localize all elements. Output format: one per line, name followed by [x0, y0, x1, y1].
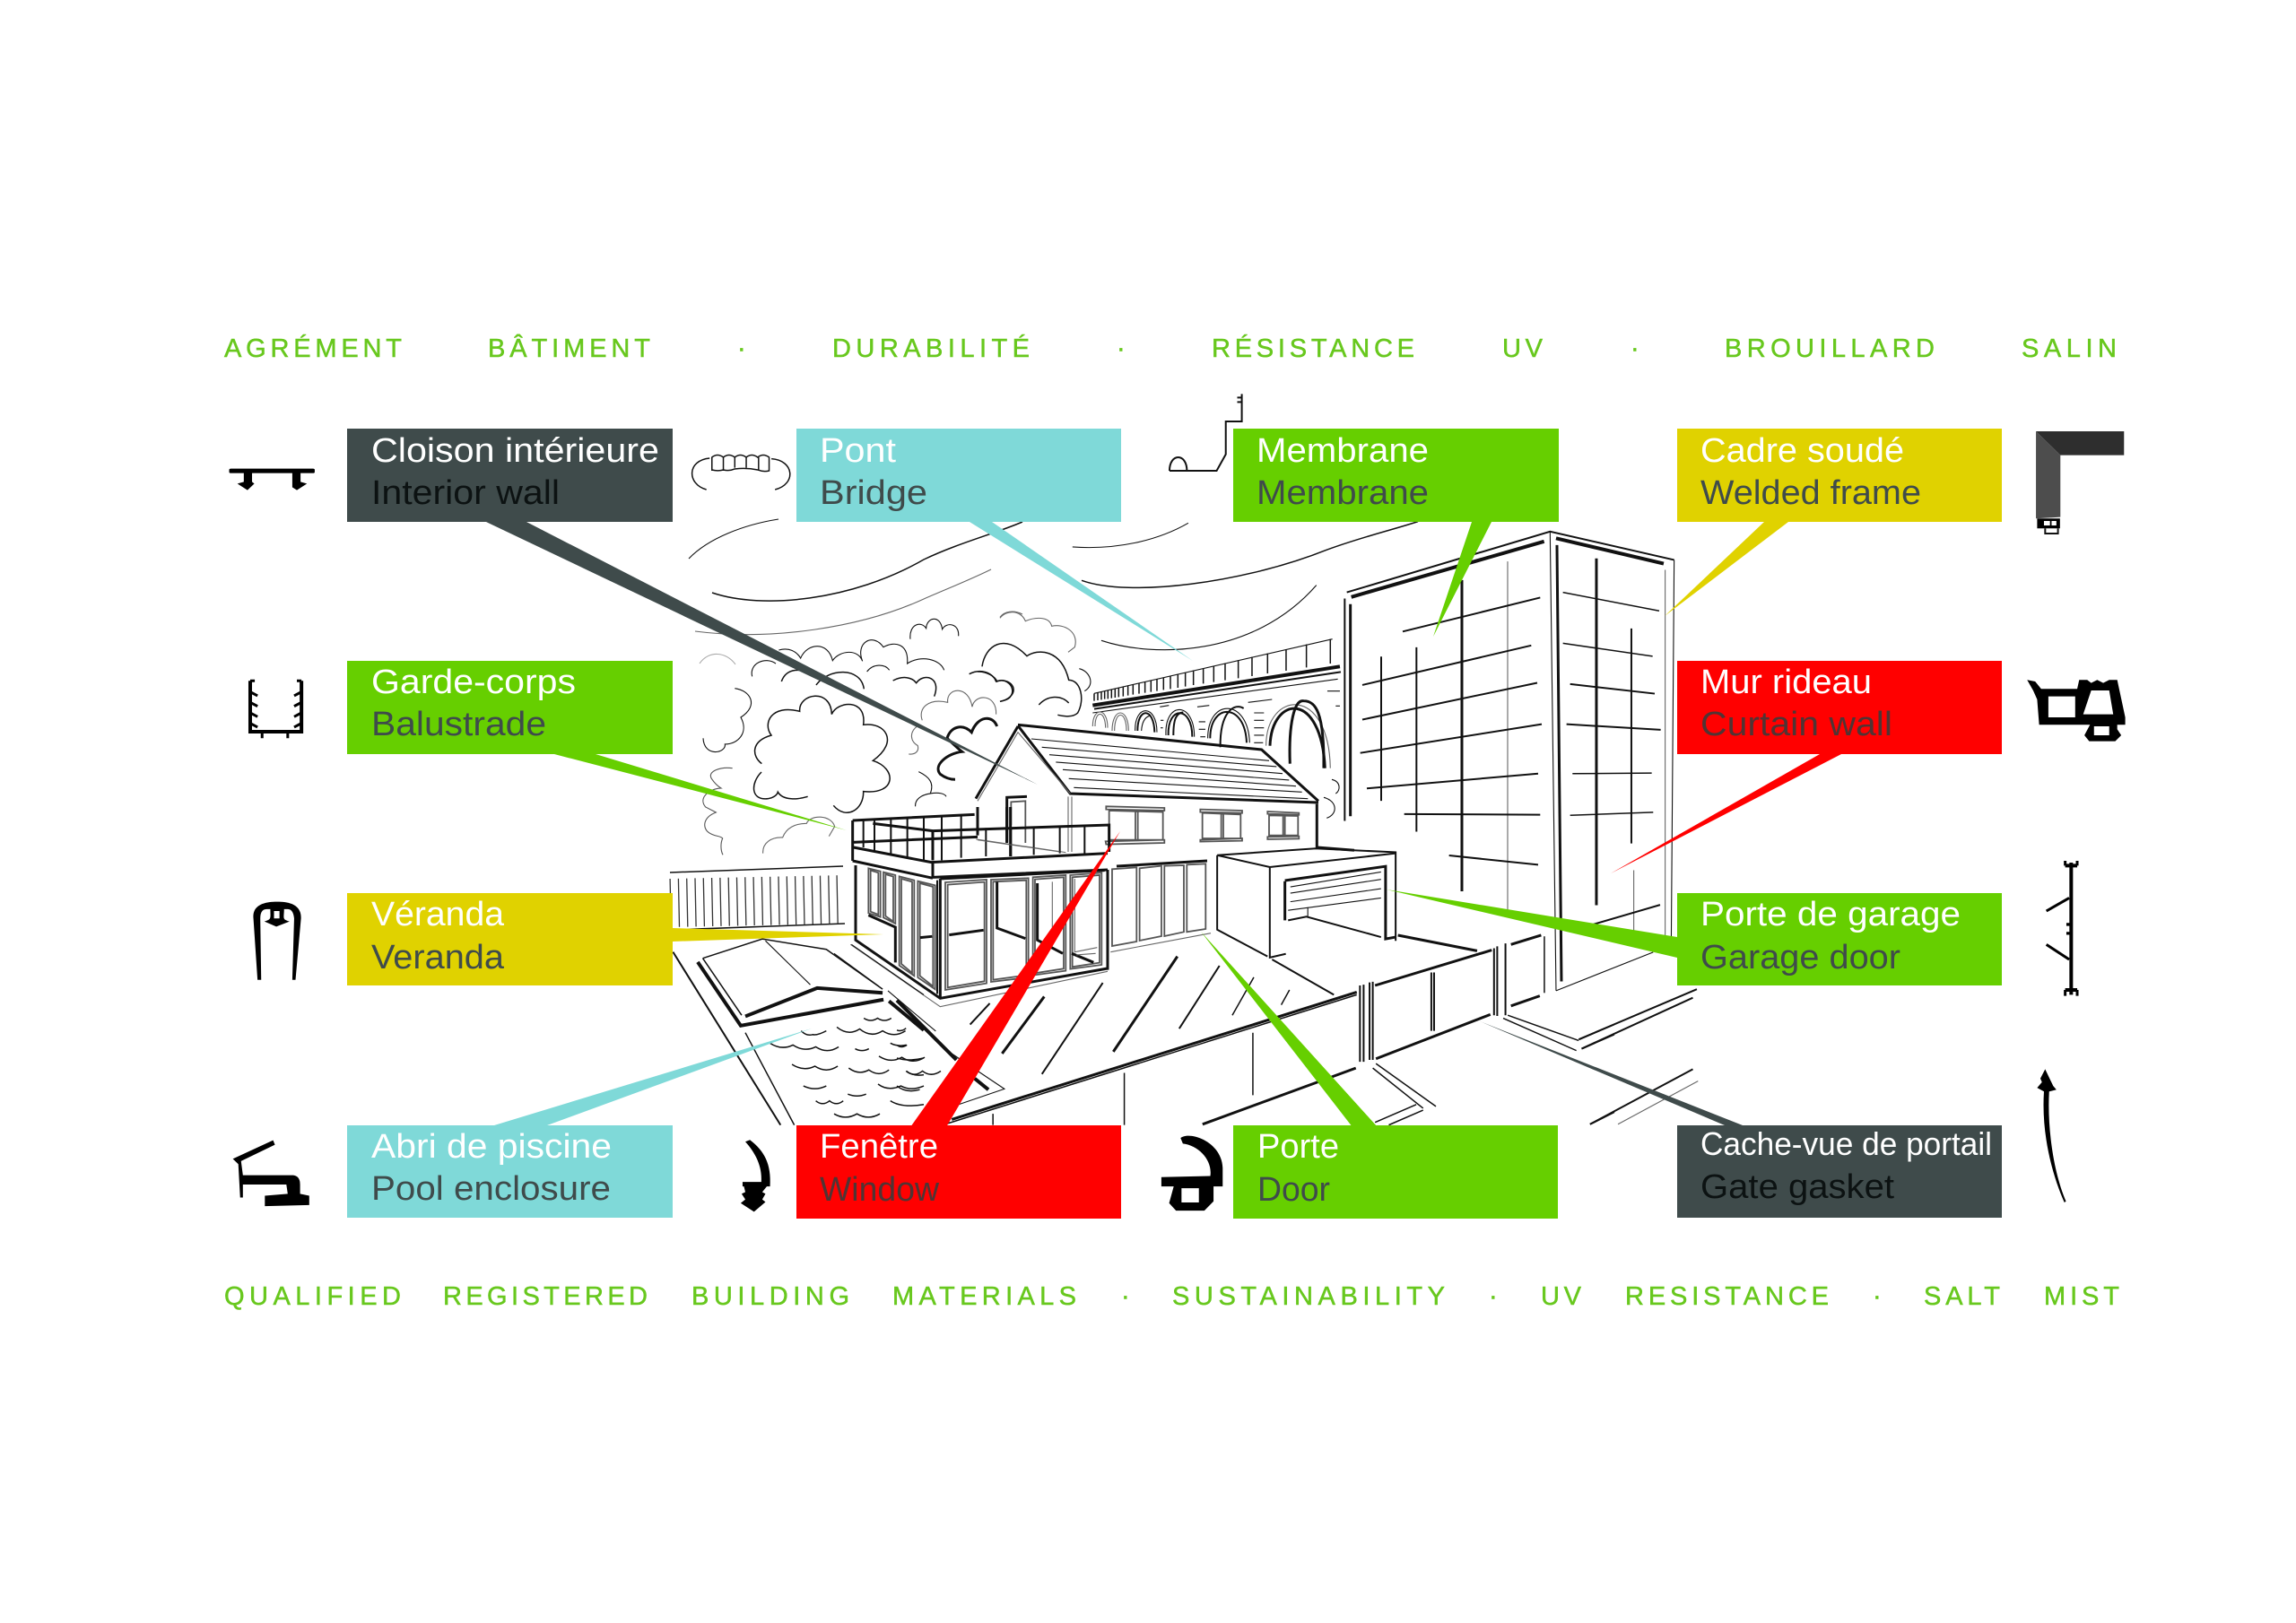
terrace railing and veranda — [834, 807, 1211, 1031]
panel: window — [796, 1125, 1121, 1219]
top tagline in French: · — [1117, 334, 1126, 363]
fence — [670, 866, 845, 930]
bottom tagline in English — [224, 1282, 2119, 1311]
panel: garage door: Porte de garage — [1700, 896, 1961, 933]
panel: curtain wall: Curtain wall — [1700, 706, 1892, 743]
swimming pool — [673, 939, 925, 1125]
bottom tagline in English: BUILDING — [691, 1282, 849, 1311]
house roof, walls and windows — [976, 725, 1354, 853]
office tower — [1344, 532, 1674, 991]
callout arrow: balustrade — [554, 754, 847, 830]
panel: garage door — [1677, 893, 2002, 985]
callout arrow: veranda — [673, 928, 883, 942]
panel: interior wall — [347, 429, 673, 522]
panel: door — [1233, 1125, 1558, 1219]
callout arrow: gate gasket — [1480, 1021, 1743, 1125]
callout arrow: bridge — [970, 522, 1193, 661]
panel: membrane: Membrane — [1257, 432, 1429, 470]
panel: interior wall: Cloison intérieure — [371, 432, 659, 470]
panel: door: Porte — [1257, 1128, 1339, 1166]
panel: window: Window — [820, 1171, 940, 1209]
panel: membrane — [1233, 429, 1559, 522]
icon: welded frame corner — [2036, 431, 2124, 534]
panel: bridge: Bridge — [820, 474, 927, 512]
icon: veranda profile — [253, 902, 301, 980]
panel: pool enclosure: Abri de piscine — [371, 1128, 612, 1166]
panel: curtain wall: Mur rideau — [1700, 664, 1872, 701]
garage, driveway and boundary wall — [946, 848, 1614, 1125]
bottom tagline in English: · — [1873, 1282, 1882, 1311]
panel: veranda: Veranda — [371, 939, 505, 976]
clouds — [700, 612, 1022, 855]
panel: balustrade: Garde-corps — [371, 664, 576, 701]
panel: welded frame — [1677, 429, 2002, 522]
bottom tagline in English: MATERIALS — [892, 1282, 1076, 1311]
bottom tagline in English: SALT — [1924, 1282, 2000, 1311]
icon: gate gasket profile — [2037, 1069, 2066, 1202]
callout arrow: curtain wall — [1611, 754, 1841, 873]
top tagline in French: BROUILLARD — [1725, 334, 1935, 363]
panel: welded frame: Welded frame — [1700, 474, 1921, 512]
icon: membrane profile — [1170, 394, 1242, 471]
icon: pool enclosure profile — [233, 1141, 309, 1206]
panel: veranda — [347, 893, 673, 985]
line drawing: building scene — [670, 519, 1698, 1125]
panel: veranda: Véranda — [371, 896, 505, 933]
panel: bridge: Pont — [820, 432, 896, 470]
panel: gate gasket — [1677, 1125, 2002, 1218]
bottom tagline in English: · — [1489, 1282, 1498, 1311]
panel: balustrade — [347, 661, 673, 754]
icon: garage door profile — [2047, 861, 2077, 996]
bottom tagline in English: · — [1121, 1282, 1130, 1311]
bottom tagline in English: RESISTANCE — [1625, 1282, 1829, 1311]
callout arrow: welded frame — [1665, 522, 1788, 616]
callout arrow: garage door — [1387, 890, 1677, 958]
panel: gate gasket: Cache-vue de portail — [1700, 1125, 1992, 1162]
panel: pool enclosure — [347, 1125, 673, 1218]
icon: interior wall profile — [230, 469, 315, 490]
panel: bridge — [796, 429, 1121, 522]
icon: door profile — [1161, 1136, 1222, 1211]
bottom tagline in English: SUSTAINABILITY — [1172, 1282, 1445, 1311]
panel: gate gasket: Gate gasket — [1700, 1168, 1894, 1206]
bottom tagline in English: QUALIFIED — [224, 1282, 401, 1311]
top tagline in French: · — [1631, 334, 1639, 363]
panel: curtain wall — [1677, 661, 2002, 754]
panel: welded frame: Cadre soudé — [1700, 432, 1904, 470]
bottom tagline in English: REGISTERED — [443, 1282, 648, 1311]
panel: pool enclosure: Pool enclosure — [371, 1170, 611, 1208]
callout arrow: window — [910, 831, 1120, 1127]
panel: door: Door — [1257, 1171, 1330, 1209]
callout arrow: membrane — [1433, 522, 1492, 637]
viaduct bridge — [1092, 639, 1341, 768]
callout arrow: door — [1201, 932, 1378, 1127]
sky curves — [689, 519, 1418, 650]
icon: balustrade profile — [250, 681, 301, 738]
panel: interior wall: Interior wall — [371, 474, 560, 512]
bottom tagline in English: MIST — [2044, 1282, 2119, 1311]
panel: garage door: Garage door — [1700, 939, 1900, 976]
top tagline in French: BÂTIMENT — [488, 334, 650, 363]
top tagline in French — [224, 334, 2117, 363]
icon: bridge profile — [692, 455, 790, 490]
icon: curtain wall profile — [2027, 680, 2126, 742]
panel: window: Fenêtre — [820, 1128, 938, 1166]
bottom tagline in English: UV — [1541, 1282, 1582, 1311]
icon: window profile — [741, 1140, 770, 1211]
top tagline in French: AGRÉMENT — [224, 334, 402, 363]
top tagline in French: SALIN — [2022, 334, 2117, 363]
callout arrow: pool enclosure — [494, 1028, 812, 1125]
top tagline in French: RÉSISTANCE — [1212, 334, 1414, 363]
top tagline in French: · — [737, 334, 746, 363]
callout arrow: interior wall — [486, 522, 1038, 785]
panel: balustrade: Balustrade — [371, 706, 546, 743]
panel: membrane: Membrane — [1257, 474, 1429, 512]
top tagline in French: UV — [1502, 334, 1544, 363]
top tagline in French: DURABILITÉ — [832, 334, 1030, 363]
